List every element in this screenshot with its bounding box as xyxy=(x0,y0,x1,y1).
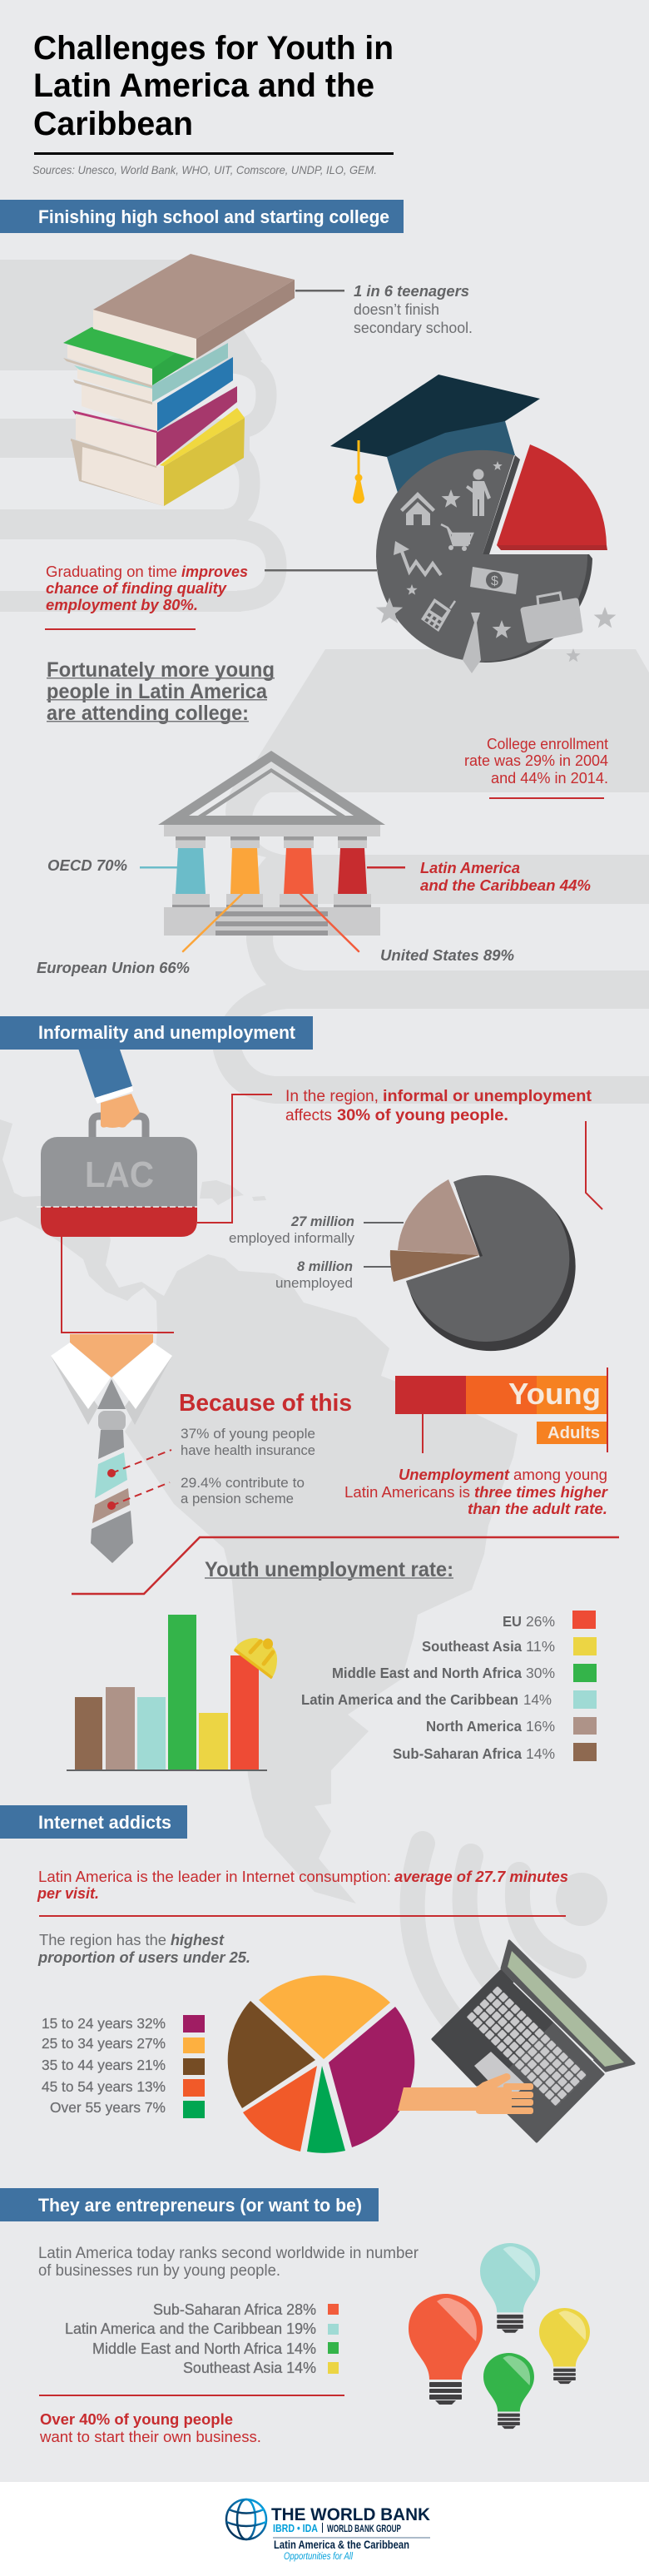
legend: businesses by region xyxy=(65,2301,339,2376)
callout: college enrollment xyxy=(464,736,608,799)
label: 8 million: 8 million xyxy=(297,1258,353,1274)
chart: young people employment pie xyxy=(390,1175,576,1351)
label: OECD: OECD 70% xyxy=(47,857,127,874)
bar chart: youth unemployment xyxy=(67,1615,277,1771)
icon: graduation cap xyxy=(330,375,540,504)
text: informal or unemployment: In the region, xyxy=(285,1088,379,1105)
legend: youth unemployment: Middle East and North Africa xyxy=(332,1665,522,1681)
icon: large red light bulb xyxy=(409,2294,483,2405)
text: want to start a business xyxy=(39,2410,261,2445)
legend: businesses by region: Middle East and North Africa 14% xyxy=(92,2340,316,2357)
icon: stack of books xyxy=(63,254,295,506)
chart: young vs adults bars: Young xyxy=(508,1377,601,1411)
background: book silhouette xyxy=(0,260,276,612)
callout: graduating on time: employment by 80%. xyxy=(46,597,198,613)
section header: informality and unemployment xyxy=(0,1016,313,1050)
text: internet consumption xyxy=(37,1869,568,1917)
text: want to start a business: want to start their own business. xyxy=(39,2428,261,2445)
label: Latin America and the Caribbean: and the Caribbean 44% xyxy=(420,877,591,894)
section header: high school: Finishing high school and starting college xyxy=(38,206,389,227)
callout: college enrollment: College enrollment xyxy=(487,736,608,752)
icon: globe xyxy=(226,2499,266,2539)
label: 27 million: 27 million xyxy=(290,1214,354,1229)
text: internet consumption: Latin America is the leader in Internet consumption: xyxy=(38,1869,391,1885)
icon: university building with columns xyxy=(158,751,385,951)
text: informal or unemployment: informal or unemployment xyxy=(383,1088,592,1105)
text: users under 25: highest xyxy=(171,1932,225,1948)
label: 27 million: employed informally xyxy=(229,1230,354,1246)
legend: youth unemployment: 16% xyxy=(526,1718,555,1735)
footer: World Bank logo xyxy=(0,2482,649,2576)
callout: graduating on time: chance of finding quality xyxy=(46,580,227,597)
icon: green light bulb xyxy=(483,2353,534,2429)
text: unemployment three times higher: three times higher xyxy=(474,1484,608,1501)
chart: young vs adults bars xyxy=(395,1367,608,1453)
icons on the pie: $ xyxy=(491,574,498,588)
footer: World Bank logo: IBRD • IDA xyxy=(273,2522,318,2534)
text: ranks second worldwide xyxy=(38,2245,419,2280)
text: unemployment three times higher: than the adult rate. xyxy=(468,1501,607,1517)
section header: high school xyxy=(0,200,404,233)
text: want to start a business: Over 40% of young people xyxy=(40,2410,233,2428)
icon: teal light bulb xyxy=(480,2243,540,2333)
legend: youth unemployment: Sub-Saharan Africa xyxy=(393,1745,522,1762)
legend: age groups: 45 to 54 years 13% xyxy=(42,2078,166,2095)
icon: collar and striped tie xyxy=(51,1334,172,1563)
heading: more young people attending college: Fortunately more young xyxy=(47,658,275,682)
title: Latin America and the xyxy=(33,67,374,104)
heading: because of this: Because of this xyxy=(179,1390,352,1417)
label: 8 million xyxy=(275,1258,391,1291)
callout: college enrollment: and 44% in 2014. xyxy=(491,770,608,787)
icons on the pie xyxy=(376,461,616,673)
text: ranks second worldwide: of businesses run by young people. xyxy=(38,2262,280,2280)
heading: more young people attending college: people in Latin America xyxy=(47,680,268,703)
section header: internet addicts xyxy=(0,1805,187,1839)
legend: youth unemployment: 26% xyxy=(526,1613,555,1630)
label: European Union: European Union 66% xyxy=(37,960,190,976)
legend: youth unemployment: 14% xyxy=(523,1691,552,1708)
text: health insurance: have health insurance xyxy=(181,1442,315,1458)
legend: youth unemployment: 14% xyxy=(526,1745,555,1762)
text: pension scheme: a pension scheme xyxy=(181,1491,294,1506)
text: pension scheme: 29.4% contribute to xyxy=(181,1475,305,1491)
section header: entrepreneurs: They are entrepreneurs (or want to be) xyxy=(38,2195,362,2216)
text: pension scheme xyxy=(181,1475,305,1506)
icon: arm holding LAC briefcase: LAC xyxy=(85,1154,154,1195)
callout: graduating on time: Graduating on time xyxy=(46,563,177,580)
legend: age groups: 15 to 24 years 32% xyxy=(42,2015,166,2032)
legend: age groups: Over 55 years 7% xyxy=(50,2099,166,2116)
background: map of Latin America xyxy=(0,1119,518,1903)
legend: youth unemployment: 30% xyxy=(526,1665,555,1681)
text: users under 25: proportion of users under 25. xyxy=(37,1949,250,1966)
label: 8 million: unemployed xyxy=(275,1275,353,1291)
sources: Sources: Unesco, World Bank, WHO, UIT, Comscore, UNDP, ILO, GEM. xyxy=(32,163,377,176)
legend: youth unemployment: Southeast Asia xyxy=(422,1638,522,1655)
text: users under 25 xyxy=(37,1932,250,1966)
callout: college enrollment: rate was 29% in 2004 xyxy=(464,752,608,769)
chart: young vs adults bars: Adults xyxy=(547,1424,600,1442)
text: informal or unemployment xyxy=(285,1088,592,1124)
callout: 1 in 6 teenagers xyxy=(295,283,473,336)
text: internet consumption: average of 27.7 minutes xyxy=(394,1869,568,1885)
legend: age groups xyxy=(42,2015,205,2118)
section header: entrepreneurs xyxy=(0,2188,379,2221)
background: wifi symbol xyxy=(413,1844,607,2024)
chart: age groups pie xyxy=(228,1975,414,2153)
text: health insurance: 37% of young people xyxy=(181,1426,315,1442)
connector lines from briefcase xyxy=(62,1094,602,1333)
footer: World Bank logo: Latin America & the Caribbean xyxy=(274,2538,409,2551)
text: informal or unemployment: 30% of young people. xyxy=(337,1107,508,1124)
section header: informality and unemployment: Informality and unemployment xyxy=(38,1022,296,1043)
icon: arm holding LAC briefcase xyxy=(37,1050,197,1237)
callout: 1 in 6 teenagers: 1 in 6 teenagers xyxy=(354,283,469,300)
icon: laptop xyxy=(433,1941,634,2142)
legend: businesses by region: Southeast Asia 14% xyxy=(183,2360,316,2376)
text: unemployment three times higher: Unemployment xyxy=(399,1467,510,1483)
section header: internet addicts: Internet addicts xyxy=(38,1812,171,1833)
title: Challenges for Youth in xyxy=(33,30,394,67)
text: ranks second worldwide: Latin America today ranks second worldwide in number xyxy=(38,2245,419,2262)
heading: more young people attending college xyxy=(47,658,275,725)
legend: age groups: 25 to 34 years 27% xyxy=(42,2035,166,2052)
legend: youth unemployment: North America xyxy=(426,1718,522,1735)
text: unemployment three times higher: Latin Americans is xyxy=(344,1484,470,1501)
background: temple silhouette xyxy=(213,649,649,1104)
icon: yellow light bulb xyxy=(539,2308,590,2384)
legend: youth unemployment: Latin America and the Caribbean xyxy=(301,1691,518,1708)
title: Caribbean xyxy=(33,106,193,142)
title xyxy=(33,30,394,142)
label: Latin America and the Caribbean xyxy=(367,860,591,894)
text: users under 25: The region has the xyxy=(39,1932,166,1948)
legend: businesses by region: Latin America and the Caribbean 19% xyxy=(65,2320,316,2337)
heading: more young people attending college: are attending college: xyxy=(47,702,249,725)
chart: employment pie xyxy=(376,444,616,673)
text: internet consumption: per visit. xyxy=(37,1885,99,1902)
callout: graduating on time xyxy=(45,563,377,630)
legend: youth unemployment xyxy=(301,1611,597,1762)
text: health insurance xyxy=(181,1426,315,1458)
text: unemployment three times higher: among young xyxy=(513,1467,607,1483)
callout: 1 in 6 teenagers: doesn’t finish xyxy=(354,301,439,318)
legend: youth unemployment: EU xyxy=(503,1613,522,1630)
legend: youth unemployment: 11% xyxy=(526,1638,555,1655)
footer: World Bank logo: Opportunities for All xyxy=(284,2550,353,2562)
text: unemployment three times higher xyxy=(344,1467,608,1517)
footer: World Bank logo: WORLD BANK GROUP xyxy=(327,2523,401,2534)
footer: World Bank logo: THE WORLD BANK xyxy=(271,2505,430,2524)
text: informal or unemployment: affects xyxy=(285,1107,332,1124)
icon: hard hat xyxy=(234,1638,277,1679)
callout: graduating on time: improves xyxy=(181,563,248,580)
callout: 1 in 6 teenagers: secondary school. xyxy=(354,320,473,336)
label: 27 million xyxy=(229,1214,404,1246)
label: United States: United States 89% xyxy=(380,947,514,964)
icon: hand on laptop xyxy=(398,2073,533,2114)
heading: youth unemployment rate: Youth unemployment rate: xyxy=(205,1558,453,1581)
legend: age groups: 35 to 44 years 21% xyxy=(42,2057,166,2073)
legend: businesses by region: Sub-Saharan Africa 28% xyxy=(153,2301,316,2318)
label: Latin America and the Caribbean: Latin America xyxy=(420,860,520,876)
